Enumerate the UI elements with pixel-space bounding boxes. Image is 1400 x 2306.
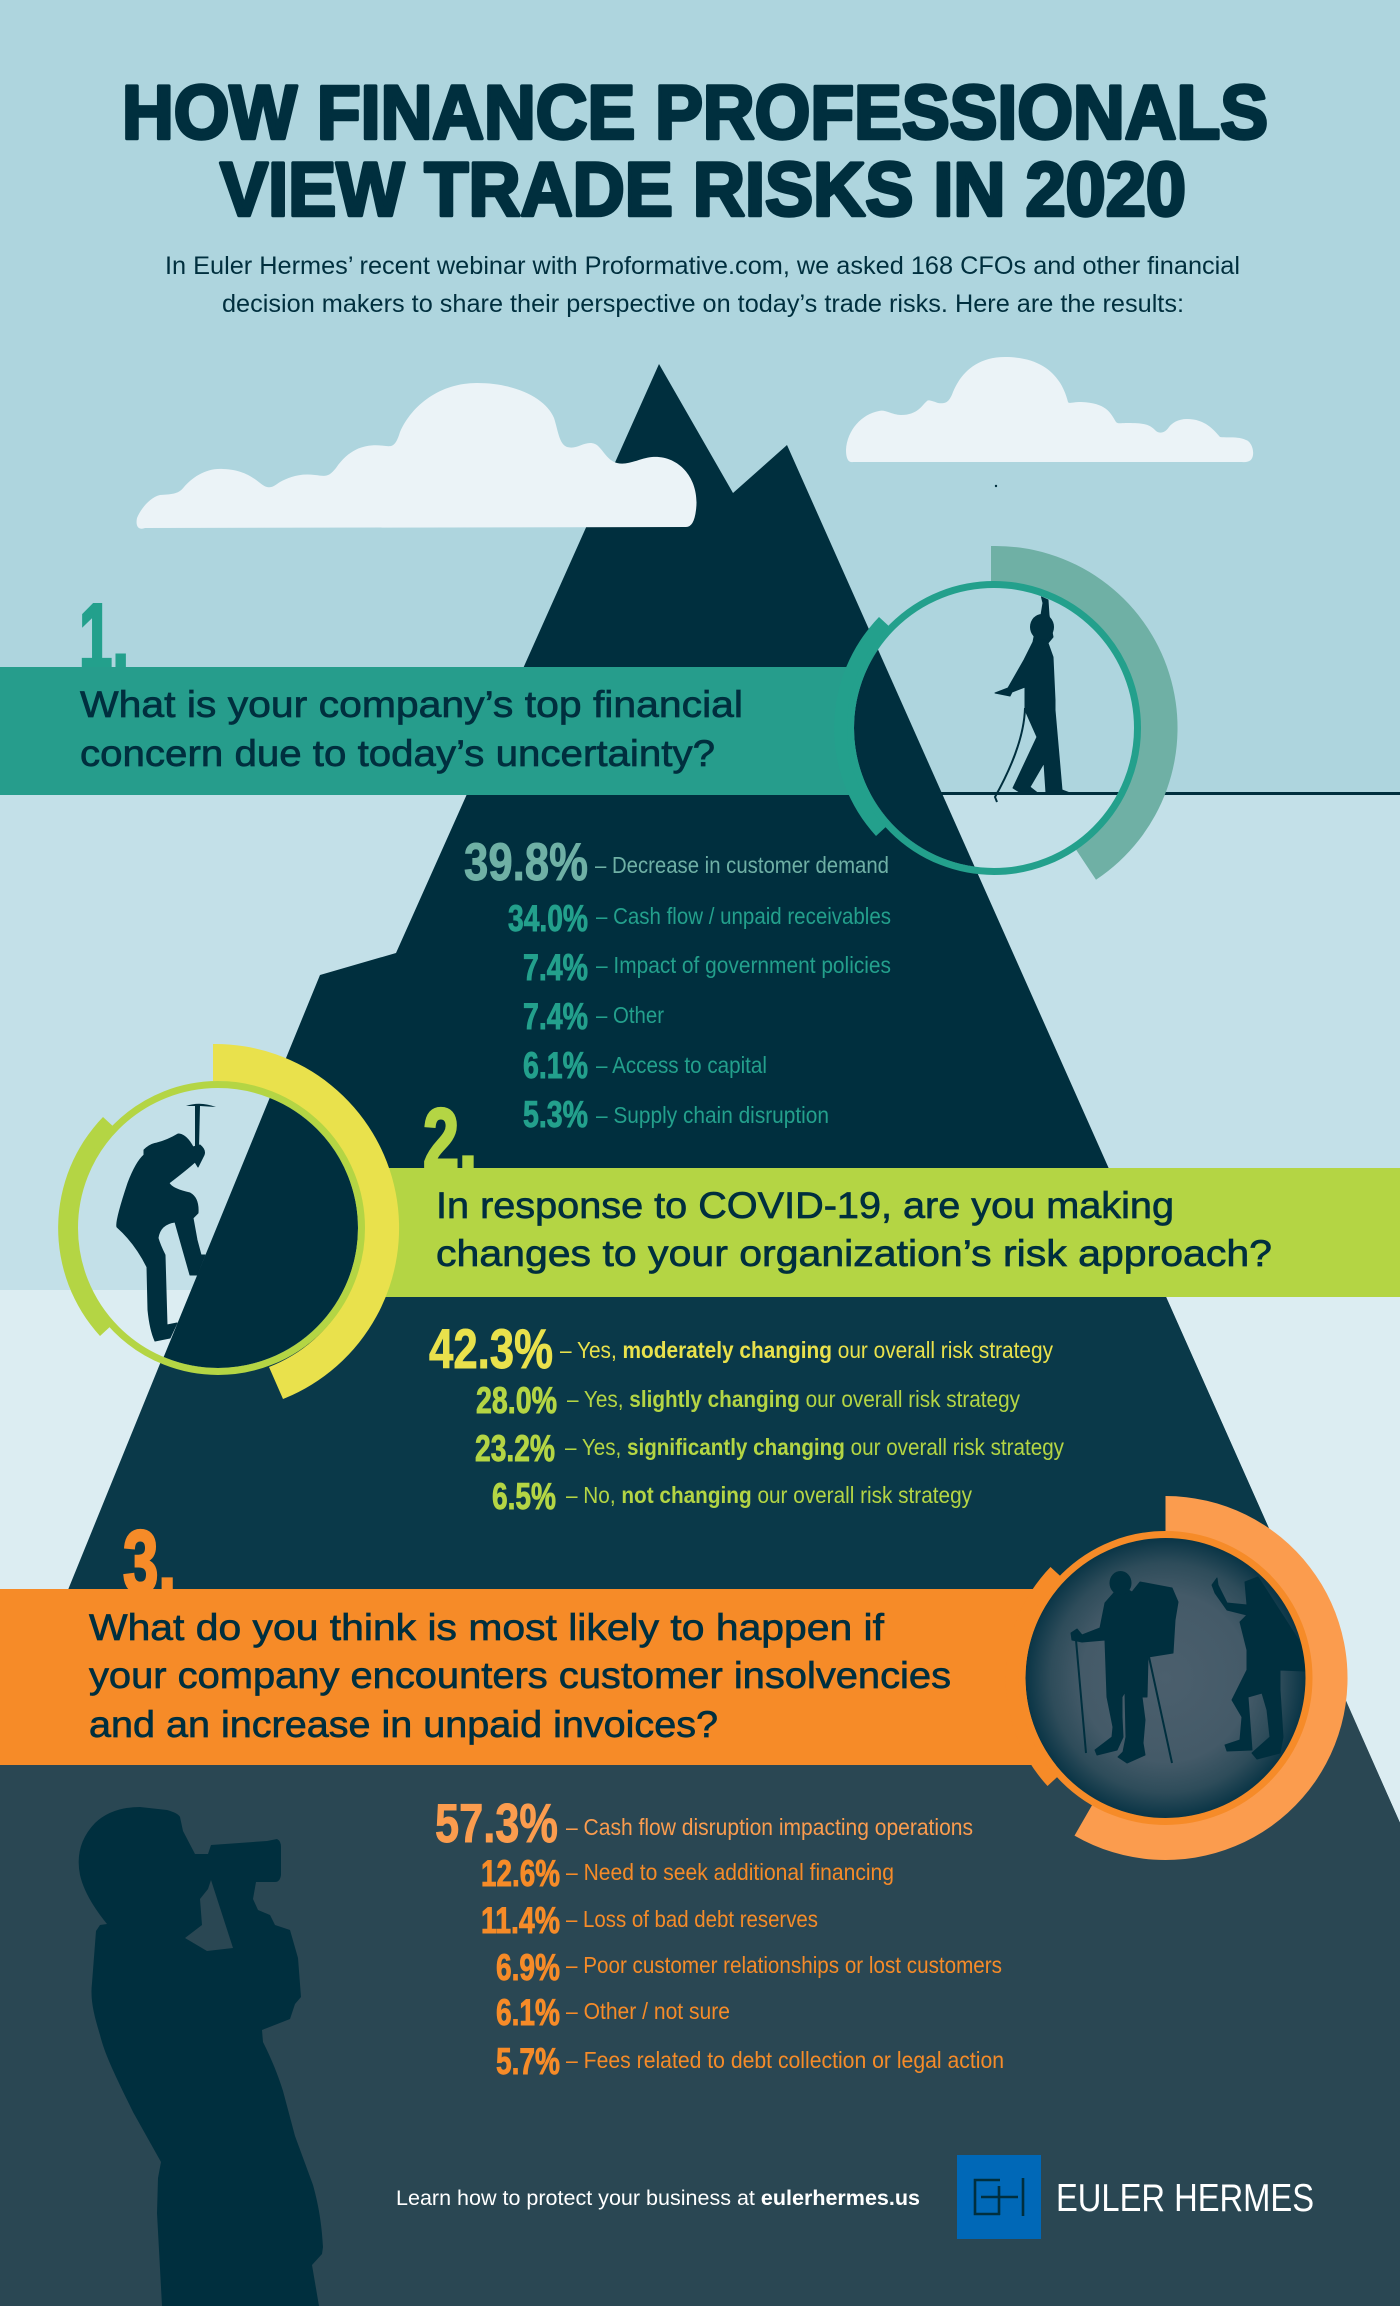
- stat 12.6%: 12.6%: [481, 1853, 560, 1894]
- call to action: Learn how to protect your business at eulerhermes.us: [396, 2186, 920, 2210]
- banner: question 3: your company encounters customer insolvencies: [89, 1655, 951, 1696]
- stat 6.1%: 6.1%: [496, 1992, 560, 2033]
- stat 34.0%: – Cash flow / unpaid receivables: [596, 903, 891, 929]
- stat 57.3%: [435, 1792, 973, 1854]
- stat 7.4% other: 7.4%: [523, 996, 588, 1037]
- stat 28.0%: – Yes, slightly changing our overall risk strategy: [567, 1386, 1020, 1412]
- cloud: right: [846, 357, 1253, 462]
- stat 7.4% government: [523, 947, 891, 988]
- banner: question 1: What is your company’s top financial: [80, 684, 743, 725]
- stat 11.4%: 11.4%: [481, 1900, 560, 1941]
- stat 6.1%: [496, 1992, 730, 2033]
- ring 1: tightrope walker: [846, 546, 1178, 880]
- banner: question 1: concern due to today’s uncertainty?: [80, 733, 715, 774]
- numeral 2: 2.: [423, 1090, 477, 1189]
- banner: question 3: and an increase in unpaid invoices?: [89, 1704, 718, 1745]
- stat 34.0%: [508, 898, 891, 939]
- stat 23.2%: – Yes, significantly changing our overall risk strategy: [565, 1434, 1064, 1460]
- title: VIEW TRADE RISKS IN 2020: [220, 148, 1186, 232]
- numeral 3: 3.: [123, 1512, 176, 1611]
- banner: question 3: [0, 1589, 1060, 1765]
- cloud: left: [137, 383, 697, 529]
- stat 23.2%: [475, 1428, 1064, 1469]
- hiker head: [1110, 1571, 1132, 1592]
- results list: question 3: [435, 1792, 1004, 2082]
- stat 6.5%: 6.5%: [492, 1476, 556, 1517]
- stat 7.4% government: 7.4%: [523, 947, 588, 988]
- banner: question 1: [0, 667, 870, 795]
- silhouette: person with binoculars: [79, 1807, 323, 2306]
- stat 6.9%: – Poor customer relationships or lost customers: [566, 1952, 1002, 1978]
- stat 28.0%: 28.0%: [476, 1380, 557, 1421]
- small speck: [995, 485, 997, 487]
- stat 7.4% other: [523, 996, 664, 1037]
- stat 39.8%: [464, 833, 889, 892]
- results list: question 1: [464, 833, 891, 1135]
- banner: question 2: changes to your organization’s risk approach?: [436, 1233, 1272, 1274]
- hiker right: [1212, 1577, 1305, 1759]
- stat 6.1%: – Other / not sure: [566, 1998, 730, 2024]
- banner: question 2: [300, 1168, 1400, 1297]
- stat 39.8%: – Decrease in customer demand: [595, 852, 889, 878]
- stat 7.4% government: – Impact of government policies: [596, 952, 891, 978]
- subtitle: In Euler Hermes’ recent webinar with Proformative.com, we asked 168 CFOs and other financial: [165, 252, 1240, 280]
- stat 6.9%: [496, 1947, 1002, 1988]
- stat 57.3%: 57.3%: [435, 1792, 558, 1854]
- stat 5.3%: – Supply chain disruption: [596, 1102, 829, 1128]
- stat 6.5%: – No, not changing our overall risk strategy: [566, 1482, 972, 1508]
- stat 57.3%: – Cash flow disruption impacting operations: [566, 1814, 973, 1840]
- subtitle: decision makers to share their perspective on today’s trade risks. Here are the results:: [222, 290, 1184, 318]
- title: HOW FINANCE PROFESSIONALS: [122, 70, 1268, 156]
- stat 5.7%: 5.7%: [496, 2041, 560, 2082]
- stat 42.3%: [429, 1317, 1053, 1380]
- stat 42.3%: 42.3%: [429, 1317, 553, 1380]
- stat 5.7%: [496, 2041, 1004, 2082]
- stat 6.1%: [523, 1045, 767, 1086]
- stat 28.0%: [476, 1380, 1020, 1421]
- stat 39.8%: 39.8%: [464, 833, 588, 892]
- tightrope: [940, 792, 1400, 795]
- stat 6.9%: 6.9%: [496, 1947, 560, 1988]
- stat 42.3%: – Yes, moderately changing our overall risk strategy: [560, 1337, 1053, 1363]
- stat 12.6%: [481, 1853, 894, 1894]
- stat 5.3%: 5.3%: [523, 1094, 588, 1135]
- stat 6.1%: 6.1%: [523, 1045, 588, 1086]
- stat 7.4% other: – Other: [596, 1002, 664, 1028]
- hiker left: [1071, 1582, 1178, 1763]
- numeral 1: 1.: [79, 584, 129, 689]
- title: [122, 70, 1268, 232]
- ring 2: ice climber: [58, 1044, 400, 1399]
- stat 34.0%: 34.0%: [508, 898, 588, 939]
- stat 6.5%: [492, 1476, 972, 1517]
- trekking poles: [1076, 1640, 1172, 1763]
- stat 11.4%: [481, 1900, 818, 1941]
- stat 23.2%: 23.2%: [475, 1428, 555, 1469]
- stat 6.1%: – Access to capital: [596, 1052, 767, 1078]
- subtitle: [165, 252, 1240, 318]
- logo: Euler Hermes: [957, 2155, 1314, 2239]
- logo: Euler Hermes: EULER HERMES: [1056, 2177, 1314, 2220]
- results list: question 2: [429, 1317, 1064, 1517]
- stat 12.6%: – Need to seek additional financing: [566, 1859, 894, 1885]
- stat 11.4%: – Loss of bad debt reserves: [566, 1906, 818, 1932]
- stat 5.3%: [523, 1094, 829, 1135]
- stat 5.7%: – Fees related to debt collection or legal action: [566, 2047, 1004, 2073]
- banner: question 2: In response to COVID-19, are you making: [436, 1185, 1174, 1226]
- ring 3: hikers: [1006, 1496, 1348, 1860]
- banner: question 3: What do you think is most likely to happen if: [89, 1607, 885, 1648]
